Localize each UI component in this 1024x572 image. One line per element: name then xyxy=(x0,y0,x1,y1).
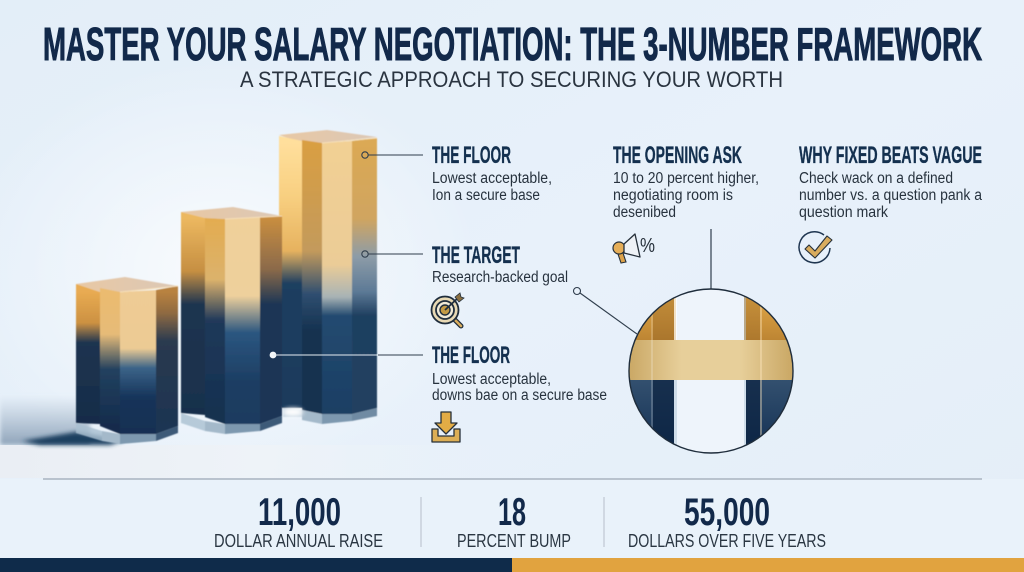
text block: the floor: Ion a secure base xyxy=(432,187,540,204)
text block: why fixed beats vague: Check wack on a defined xyxy=(799,170,953,187)
text block: the floor: Lowest acceptable, xyxy=(432,170,552,187)
text block: the floor lower: downs bae on a secure base xyxy=(432,387,607,404)
text block: the opening ask: negotiating room is xyxy=(613,187,733,204)
stat: 55,000: 55,000 xyxy=(684,491,770,534)
icon: megaphone with percent xyxy=(613,234,655,263)
text block: the floor: THE FLOOR xyxy=(432,142,511,169)
connector line to lens from target xyxy=(574,288,637,334)
text block: why fixed beats vague: number vs. a question pank a xyxy=(799,187,982,204)
stat: 11,000: DOLLAR ANNUAL RAISE xyxy=(214,531,383,551)
leader line: the floor bottom xyxy=(270,352,423,358)
text block: the target: THE TARGET xyxy=(432,242,520,269)
icon: check circle xyxy=(799,232,832,263)
bar: medium xyxy=(181,207,282,434)
text block: the opening ask: desenibed xyxy=(613,204,676,221)
bar: tall xyxy=(279,130,377,424)
footer bar xyxy=(0,558,1024,572)
text block: the floor lower: THE FLOOR xyxy=(432,342,510,369)
text block: the floor xyxy=(432,142,552,204)
text block: the opening ask: THE OPENING ASK xyxy=(613,142,742,169)
text block: why fixed beats vague: question mark xyxy=(799,204,888,221)
text block: the target xyxy=(432,242,568,286)
divider rule xyxy=(43,478,982,480)
stat: 11,000: 11,000 xyxy=(258,491,341,534)
bar chart: three glass bars xyxy=(22,130,377,445)
stat: 55,000 xyxy=(628,491,826,551)
stat separator xyxy=(420,497,422,547)
text block: why fixed beats vague xyxy=(799,142,982,221)
text block: the target: Research-backed goal xyxy=(432,269,568,286)
leader line: the target xyxy=(362,251,423,257)
stat: 11,000 xyxy=(214,491,383,551)
stat: 18 xyxy=(457,491,571,551)
stat: 18: 18 xyxy=(498,491,526,534)
leader line: the floor top xyxy=(362,152,423,158)
text block: the opening ask: 10 to 20 percent higher, xyxy=(613,170,759,187)
text block: the floor lower xyxy=(432,342,607,404)
icon: megaphone with percent: % xyxy=(640,235,655,257)
icon: download tray xyxy=(432,412,460,442)
text block: the floor lower: Lowest acceptable, xyxy=(432,371,551,388)
stat: 55,000: DOLLARS OVER FIVE YEARS xyxy=(628,531,826,551)
connector line to lens from opening ask xyxy=(710,229,712,289)
stat: 18: PERCENT BUMP xyxy=(457,531,571,551)
subtitle: A STRATEGIC APPROACH TO SECURING YOUR WORTH xyxy=(240,67,783,92)
bar: short xyxy=(76,277,178,444)
shadow under bars xyxy=(22,432,125,445)
icon: target xyxy=(432,293,464,326)
stat separator xyxy=(603,497,605,547)
text block: the opening ask xyxy=(613,142,759,221)
magnified lens circle xyxy=(628,288,794,454)
